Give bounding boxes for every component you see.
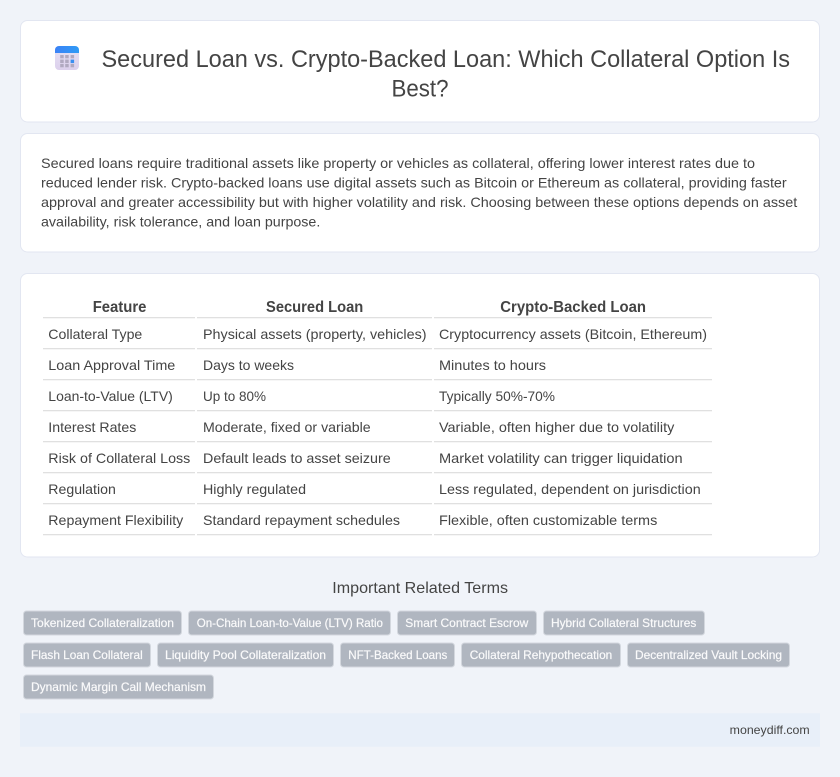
row: collateral type: Physical assets (property, vehicles): [203, 326, 426, 342]
panel: summary paragraph: [20, 134, 820, 252]
tag: [544, 611, 704, 635]
row: risk of collateral loss: Risk of Collateral Loss: [48, 450, 190, 466]
row: loan approval time: Days to weeks: [203, 357, 294, 373]
panel: summary paragraph: reduced lender risk. Crypto-backed loans use digital assets such as Bitcoin or Ethereum as collateral, providing faster: [41, 174, 787, 190]
panel: comparison table: [20, 274, 820, 557]
row: loan-to-value: Up to 80%: [203, 388, 266, 404]
row: loan approval time: Minutes to hours: [439, 357, 546, 373]
title: [102, 46, 790, 102]
table header row: Crypto-Backed Loan: [500, 299, 646, 316]
row: loan-to-value: [43, 388, 712, 411]
table header row: Feature: [93, 299, 146, 316]
row: collateral type: [43, 326, 712, 349]
tag: Tokenized Collateralization: [31, 616, 174, 630]
row: collateral type: Cryptocurrency assets (Bitcoin, Ethereum): [439, 326, 707, 342]
tag: NFT-Backed Loans: [348, 648, 447, 662]
footer bar: moneydiff.com: [730, 723, 810, 737]
row: risk of collateral loss: [43, 450, 712, 473]
tag: [158, 643, 334, 667]
related term tags: [24, 611, 790, 699]
header panel: [20, 20, 820, 122]
row: loan-to-value: Loan-to-Value (LTV): [48, 388, 173, 404]
tag: [188, 611, 390, 635]
row: interest rates: Interest Rates: [48, 419, 136, 435]
row: repayment flexibility: Standard repayment schedules: [203, 512, 400, 528]
row: interest rates: Moderate, fixed or variable: [203, 419, 371, 435]
row: risk of collateral loss: Default leads to asset seizure: [203, 450, 391, 466]
title: Secured Loan vs. Crypto-Backed Loan: Which Collateral Option Is: [102, 46, 790, 73]
table header row: Secured Loan: [266, 299, 363, 316]
heading: important related terms: Important Related Terms: [332, 580, 508, 597]
row: regulation: Regulation: [48, 481, 116, 497]
row: repayment flexibility: [43, 512, 712, 535]
tag: [628, 643, 790, 667]
row: loan-to-value: Typically 50%-70%: [439, 388, 555, 404]
panel: summary paragraph: Secured loans require traditional assets like property or vehicles as collateral, offering lower interest rates due to: [41, 155, 755, 171]
icon: calendar: [55, 46, 79, 70]
tag: Liquidity Pool Collateralization: [165, 648, 326, 662]
row: risk of collateral loss: Market volatility can trigger liquidation: [439, 450, 683, 466]
tag: Flash Loan Collateral: [31, 648, 143, 662]
tag: [398, 611, 536, 635]
table header row: [43, 299, 712, 318]
tag: Dynamic Margin Call Mechanism: [31, 680, 206, 694]
row: loan approval time: [43, 357, 712, 380]
row: collateral type: Collateral Type: [48, 326, 143, 342]
row: regulation: Highly regulated: [203, 481, 306, 497]
tag: Decentralized Vault Locking: [635, 648, 782, 662]
row: loan approval time: Loan Approval Time: [48, 357, 176, 373]
tag: [24, 675, 214, 699]
row: interest rates: [43, 419, 712, 442]
panel: summary paragraph: approval and greater accessibility but with higher volatility and risk. Choosing between these options depends on asset: [41, 194, 797, 210]
footer bar: [20, 713, 820, 747]
title: Best?: [392, 76, 448, 102]
row: regulation: Less regulated, dependent on jurisdiction: [439, 481, 701, 497]
tag: Smart Contract Escrow: [405, 616, 529, 630]
tag: [340, 643, 454, 667]
tag: [24, 643, 150, 667]
tag: On-Chain Loan-to-Value (LTV) Ratio: [197, 616, 383, 630]
tag: [462, 643, 620, 667]
row: repayment flexibility: Flexible, often customizable terms: [439, 512, 657, 528]
tag: Hybrid Collateral Structures: [551, 616, 696, 630]
row: repayment flexibility: Repayment Flexibility: [48, 512, 183, 528]
row: interest rates: Variable, often higher due to volatility: [439, 419, 674, 435]
panel: summary paragraph: availability, risk tolerance, and loan purpose.: [41, 214, 320, 230]
tag: Collateral Rehypothecation: [470, 648, 612, 662]
row: regulation: [43, 481, 712, 504]
tag: [24, 611, 182, 635]
